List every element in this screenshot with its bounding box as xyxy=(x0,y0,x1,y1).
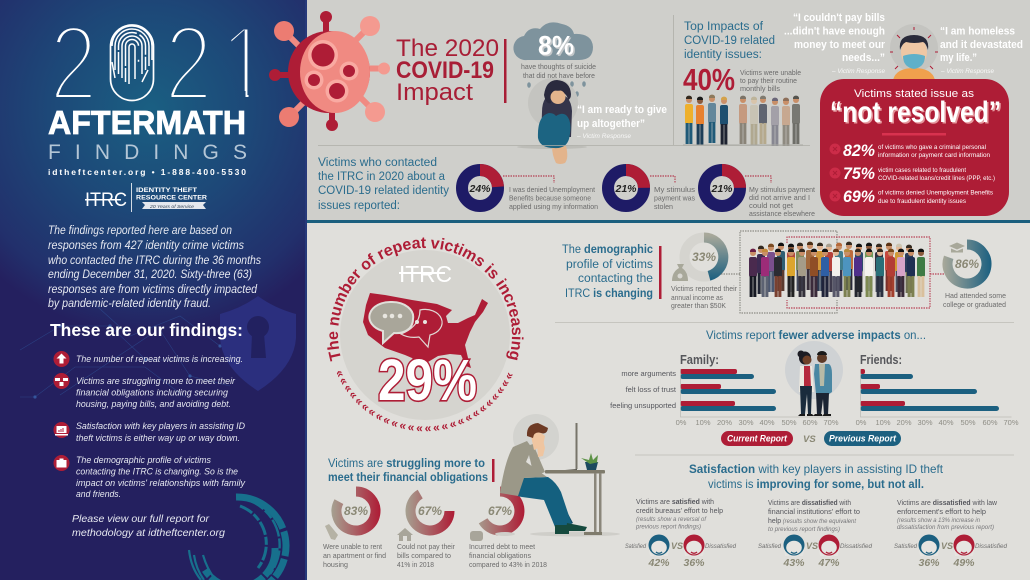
heading: satisfaction: victims is improving for some, but not all. xyxy=(708,477,924,491)
donut 83%: 83% xyxy=(344,504,368,518)
column: credit bureaus: Dissatisfied xyxy=(705,543,736,550)
legend: current vs previous: Current Report xyxy=(727,434,788,444)
intro text block xyxy=(48,225,261,310)
intro text block: by pandemic-related identity fraud. xyxy=(48,298,211,310)
finding 4 xyxy=(54,455,245,499)
donut 67% bills: bills compared to xyxy=(397,551,451,560)
finding 4: contacting the ITRC is changing. So is the xyxy=(76,466,238,476)
row: 69%: 69% xyxy=(843,187,875,206)
row: 75%: 75% xyxy=(843,164,875,183)
map: United States xyxy=(363,293,488,368)
column: credit bureaus xyxy=(625,499,736,569)
bar chart: friends: 60% xyxy=(982,418,998,427)
quote: ready to give up xyxy=(576,104,667,140)
callout: 8% suicide cloud: have thoughts of suicide xyxy=(521,62,596,71)
bar chart: friends: Friends: xyxy=(860,352,902,367)
heading: FINDINGS: FINDINGS xyxy=(48,141,247,164)
row: 82%: information or payment card information xyxy=(878,152,990,159)
heading: struggling more: Victims are struggling more to xyxy=(328,458,485,470)
donut 21% no assistance: did not arrive and I xyxy=(749,193,810,202)
stat: 40%: Victims were unable xyxy=(740,68,801,77)
bar chart: friends xyxy=(856,352,1019,427)
column: credit bureaus: previous report findings) xyxy=(635,524,701,530)
bar chart: friends: 50% xyxy=(960,418,976,427)
heading: demographic profile: profile of victims xyxy=(566,259,653,271)
bar chart: family: Family: xyxy=(680,352,719,367)
illustration: crowd xyxy=(749,242,925,297)
finding 2: housing, paying bills, and avoiding debt. xyxy=(76,399,231,409)
finding 1 xyxy=(54,351,243,367)
heading: demographic profile xyxy=(562,244,662,300)
callout: 8% suicide cloud: 8% xyxy=(538,30,574,60)
donut 24%: I was denied Unemployment xyxy=(509,185,596,194)
quote: homeless xyxy=(940,26,1023,75)
row: 69%: due to fraudulent identity issues xyxy=(878,198,967,205)
column: financial institutions: VS xyxy=(806,541,818,551)
bar chart: friends: 0% xyxy=(856,418,867,427)
column: financial institutions: 47% xyxy=(817,557,840,569)
quote: couldn't pay bills: needs...” xyxy=(842,52,885,64)
heading: The 2020 COVID-19 Impact: The 2020 xyxy=(396,35,499,62)
panel: left sidebar xyxy=(0,0,305,580)
title: 2021 with fingerprint: 2021 xyxy=(50,3,268,123)
donut 33% income: annual income as xyxy=(671,293,723,302)
donut 67% bills xyxy=(397,494,455,569)
quote: couldn't pay bills: – Victim Response xyxy=(831,68,885,75)
column: credit bureaus: 36% xyxy=(683,557,705,569)
callout: 8% suicide cloud: 8% xyxy=(540,32,576,62)
column: law enforcement: Victims are dissatisfied with law xyxy=(897,500,998,507)
donut 21% stolen: payment was xyxy=(654,194,695,202)
donut 67% debt: 67% xyxy=(488,504,512,518)
bar chart: family: more arguments xyxy=(621,369,676,378)
icon: key xyxy=(325,524,338,540)
donut 21% stolen: My stimulus xyxy=(654,185,695,194)
heading: The 2020 COVID-19 Impact: COVID-19 xyxy=(396,57,494,84)
column: financial institutions: help (results show the equivalent xyxy=(768,518,856,525)
donut 21% stolen: 21% xyxy=(614,183,637,195)
column: law enforcement: dissatisfaction from previous report) xyxy=(897,525,994,531)
donut 83% xyxy=(323,492,386,569)
heading: victims who contacted: the ITRC in 2020 about a xyxy=(318,171,446,183)
legend: current vs previous: Previous Report xyxy=(829,434,897,444)
quote: couldn't pay bills xyxy=(784,12,886,75)
quote: ready to give up: – Victim Response xyxy=(576,133,631,140)
column: law enforcement: enforcement's effort to help xyxy=(897,509,986,516)
heading: top impacts: Top Impacts of xyxy=(684,21,764,33)
intro text block: responses from 427 identity crime victims xyxy=(48,240,244,252)
quote: couldn't pay bills: money to meet our xyxy=(794,39,886,51)
heading: satisfaction xyxy=(689,462,944,491)
quote: homeless: my life.” xyxy=(940,52,977,64)
panel: not resolved xyxy=(820,79,1009,216)
column: credit bureaus: Satisfied xyxy=(625,543,646,550)
column: law enforcement: Satisfied xyxy=(894,543,917,550)
bar chart: family: feeling unsupported xyxy=(610,401,676,410)
bar chart: friends: 10% xyxy=(875,418,891,427)
logo: ITRC: IDENTITY THEFT xyxy=(136,188,197,194)
finding 4: and friends. xyxy=(76,489,121,499)
donut 33% income: 33% xyxy=(692,250,716,264)
heading: top impacts xyxy=(684,21,775,61)
heading: fewer adverse impacts: Victims report fewer adverse impacts on... xyxy=(706,328,926,342)
bar chart: friends: 30% xyxy=(917,418,933,427)
finding 2 xyxy=(54,373,236,409)
bar chart: family: 60% xyxy=(802,418,818,427)
stat: 40%: monthly bills xyxy=(740,84,780,93)
donut 86% education: college or graduated xyxy=(943,300,1006,309)
row: 82% xyxy=(830,141,990,160)
heading: top impacts: COVID-19 related xyxy=(684,35,775,47)
illustration: sad woman xyxy=(517,78,587,164)
logo: ITRC white: ITRC xyxy=(399,261,452,287)
closing note: Please view our full report for xyxy=(72,513,209,525)
finding 4: The demographic profile of victims xyxy=(76,455,211,465)
finding 3 xyxy=(54,421,245,443)
quote: ready to give up: “I am ready to give xyxy=(577,104,667,116)
column: financial institutions xyxy=(758,500,872,569)
finding 2: financial obligations including securing xyxy=(76,388,228,398)
donut 33% income: greater than $50K xyxy=(671,301,726,310)
illustration: man in mask xyxy=(890,24,938,80)
bar chart: family xyxy=(610,352,839,427)
intro text block: who contacted the ITRC during the 36 months xyxy=(48,255,261,267)
quote: homeless: – Victim Response xyxy=(940,68,994,75)
donut 67% bills: 41% in 2018 xyxy=(397,560,434,569)
column: financial institutions: to previous report findings) xyxy=(768,527,840,533)
badge: repeat victims 29%: «««««««««««««««««««««««««« xyxy=(336,371,513,432)
intro text block: The findings reported here are based on xyxy=(48,225,232,237)
column: law enforcement: VS xyxy=(941,541,953,551)
donut 21% no assistance: 21% xyxy=(710,183,733,195)
donut 67% debt xyxy=(469,492,547,569)
heading: struggling more xyxy=(328,458,494,484)
heading: AFTERMATH: AFTERMATH xyxy=(48,104,246,141)
finding 3: Satisfaction with key players in assisting ID xyxy=(76,421,245,431)
donut 83%: an apartment or find xyxy=(323,551,386,560)
icon: speech bubbles xyxy=(369,302,442,347)
right page background xyxy=(305,0,1030,580)
column: financial institutions: Dissatisfied xyxy=(840,543,872,550)
column: law enforcement: (results show a 13% increase in xyxy=(897,518,981,524)
donut 83%: housing xyxy=(323,560,348,569)
row: 82%: 82% xyxy=(843,141,875,160)
donut 67% bills: 67% xyxy=(418,504,442,518)
legend: current vs previous: VS xyxy=(803,434,816,445)
column: law enforcement: 49% xyxy=(952,557,975,569)
icon: teal fingerprint arc xyxy=(189,497,286,580)
donut 86% education: 86% xyxy=(955,257,979,271)
bar chart: friends: 70% xyxy=(1003,418,1019,427)
callout: 8% suicide cloud xyxy=(513,22,596,100)
quote: ready to give up: up altogether” xyxy=(577,118,645,130)
badge: repeat victims 29% xyxy=(327,238,524,432)
stat: 40% xyxy=(683,62,801,97)
column: credit bureaus: VS xyxy=(671,541,683,551)
badge: repeat victims 29%: The number of repeat victims is increasing xyxy=(327,238,524,362)
column: financial institutions: financial institutions' effort to xyxy=(768,509,860,516)
heading: demographic profile: ITRC is changing xyxy=(565,288,653,300)
heading: demographic profile: The demographic xyxy=(562,244,654,256)
bar chart: family: 40% xyxy=(759,418,775,427)
donut 83%: Were unable to rent xyxy=(323,542,383,551)
logo: ITRC: RESOURCE CENTER xyxy=(136,196,208,202)
illustration: stressed man at desk xyxy=(495,414,620,536)
row: 69%: of victims denied Unemployment Benefits xyxy=(878,190,994,196)
donut 33% income: Victims reported their xyxy=(671,284,737,293)
quote: homeless: and it devastated xyxy=(940,39,1023,51)
column: credit bureaus: (results show a reversal of xyxy=(636,517,707,523)
donut 67% bills: Could not pay their xyxy=(397,542,455,551)
contact line: idtheftcenter.org • 1-888-400-5530 xyxy=(48,167,246,177)
bar chart: friends: 40% xyxy=(938,418,954,427)
heading: victims who contacted: COVID-19 related identity xyxy=(318,185,449,197)
donut 24%: 24% xyxy=(468,183,491,195)
column: law enforcement: Dissatisfied xyxy=(975,543,1007,550)
row: 82%: of victims who gave a criminal personal xyxy=(878,144,987,151)
logo: ITRC xyxy=(85,183,208,212)
donut 86% education xyxy=(943,242,1006,309)
heading: demographic profile: contacting the xyxy=(578,273,653,285)
bar chart: family: 20% xyxy=(717,418,732,427)
bar chart: family: felt loss of trust xyxy=(626,385,677,394)
column: financial institutions: 43% xyxy=(782,557,805,569)
stat: 29%: 29% xyxy=(378,348,477,413)
bar chart: friends: 20% xyxy=(896,418,912,427)
row: 75%: victim cases related to fraudulent xyxy=(878,167,966,174)
intro text block: responses are from victims directly impacted xyxy=(48,284,258,296)
panel: not resolved: Victims stated issue as xyxy=(854,88,975,100)
intro text block: ending December 31, 2020. Sixty-three (63) xyxy=(48,269,252,281)
closing note: methodology at idtheftcenter.org xyxy=(72,527,225,539)
dotted frames xyxy=(721,231,948,313)
donut 21% stolen: stolen xyxy=(654,202,673,211)
donut 67% debt: Incurred debt to meet xyxy=(469,542,536,551)
heading: The 2020 COVID-19 Impact: Impact xyxy=(396,79,473,106)
donut 24%: Benefits because someone xyxy=(509,194,591,202)
donut 67% debt: financial obligations xyxy=(469,551,531,560)
column: law enforcement xyxy=(894,500,1007,569)
column: credit bureaus: Victims are satisfied with xyxy=(636,499,714,506)
legend: current vs previous xyxy=(721,431,901,446)
closing note xyxy=(72,513,225,539)
quote: couldn't pay bills: “I couldn't pay bills xyxy=(793,12,885,24)
row: 75% xyxy=(830,164,995,183)
icon: virus xyxy=(269,11,390,131)
heading: victims who contacted xyxy=(318,157,449,212)
donut 67% debt: compared to 43% in 2018 xyxy=(469,560,547,569)
donut 21% no assistance: My stimulus payment xyxy=(749,185,816,194)
heading: struggling more: meet their financial obligations xyxy=(328,472,488,484)
donut 24% xyxy=(462,170,598,211)
icon: piggy bank xyxy=(470,531,483,541)
finding 3: theft victims is either way up or way down. xyxy=(76,433,240,443)
bar chart: family: 10% xyxy=(695,418,711,427)
quote: couldn't pay bills: ...didn't have enough xyxy=(784,26,885,38)
row: 69% xyxy=(830,187,994,206)
quote: homeless: “I am homeless xyxy=(940,26,1015,38)
column: law enforcement: 36% xyxy=(918,557,940,569)
donut 21% no assistance: could not get xyxy=(749,201,794,210)
bar chart: family: 50% xyxy=(781,418,797,427)
column: financial institutions: Satisfied xyxy=(758,543,781,550)
donut 86% education: Had attended some xyxy=(945,291,1006,300)
bar chart: family: 70% xyxy=(823,418,839,427)
logo: ITRC: 20 Years of Service xyxy=(149,204,195,209)
icon: graduation cap xyxy=(949,242,965,252)
heading: The 2020 COVID-19 Impact xyxy=(396,35,506,106)
column: credit bureaus: 42% xyxy=(647,557,670,569)
finding 2: Victims are struggling more to meet their xyxy=(76,376,236,386)
column: credit bureaus: credit bureaus' effort to help xyxy=(636,508,723,515)
illustration: couple xyxy=(785,341,843,416)
callout: 8% suicide cloud: that did not have before xyxy=(523,71,595,80)
donut 24%: applied using my information xyxy=(509,202,598,211)
illustration: group of people xyxy=(683,95,803,146)
bar chart: family: 30% xyxy=(738,418,754,427)
donut 21% stolen xyxy=(608,170,695,211)
stat: 40%: to pay their routine xyxy=(740,76,797,85)
logo: ITRC: ITRC xyxy=(85,190,127,211)
stat: 40%: 40% xyxy=(683,62,735,97)
heading: victims who contacted: Victims who contacted xyxy=(318,157,437,169)
row: 75%: COVID-related loans/credit lines (PPP, etc.) xyxy=(878,175,995,182)
bar chart: family: 0% xyxy=(676,418,687,427)
heading: These are our findings: These are our findings: xyxy=(50,320,243,340)
icon: shield with keyhole xyxy=(220,296,296,391)
finding 1: The number of repeat victims is increasing. xyxy=(76,354,243,364)
donut 33% income xyxy=(671,238,737,310)
heading: satisfaction: Satisfaction with key players in assisting ID theft xyxy=(689,462,944,476)
icon: house xyxy=(397,528,413,541)
heading: top impacts: identity issues: xyxy=(684,49,762,61)
donut 21% no assistance: assistance elsewhere xyxy=(749,209,815,218)
donut 21% no assistance xyxy=(704,170,816,218)
heading: victims who contacted: issues reported: xyxy=(318,200,400,212)
icon: money bag xyxy=(672,264,688,281)
finding 4: impact on victims' relationships with family xyxy=(76,478,245,488)
column: financial institutions: Victims are dissatisfied with xyxy=(768,500,851,507)
